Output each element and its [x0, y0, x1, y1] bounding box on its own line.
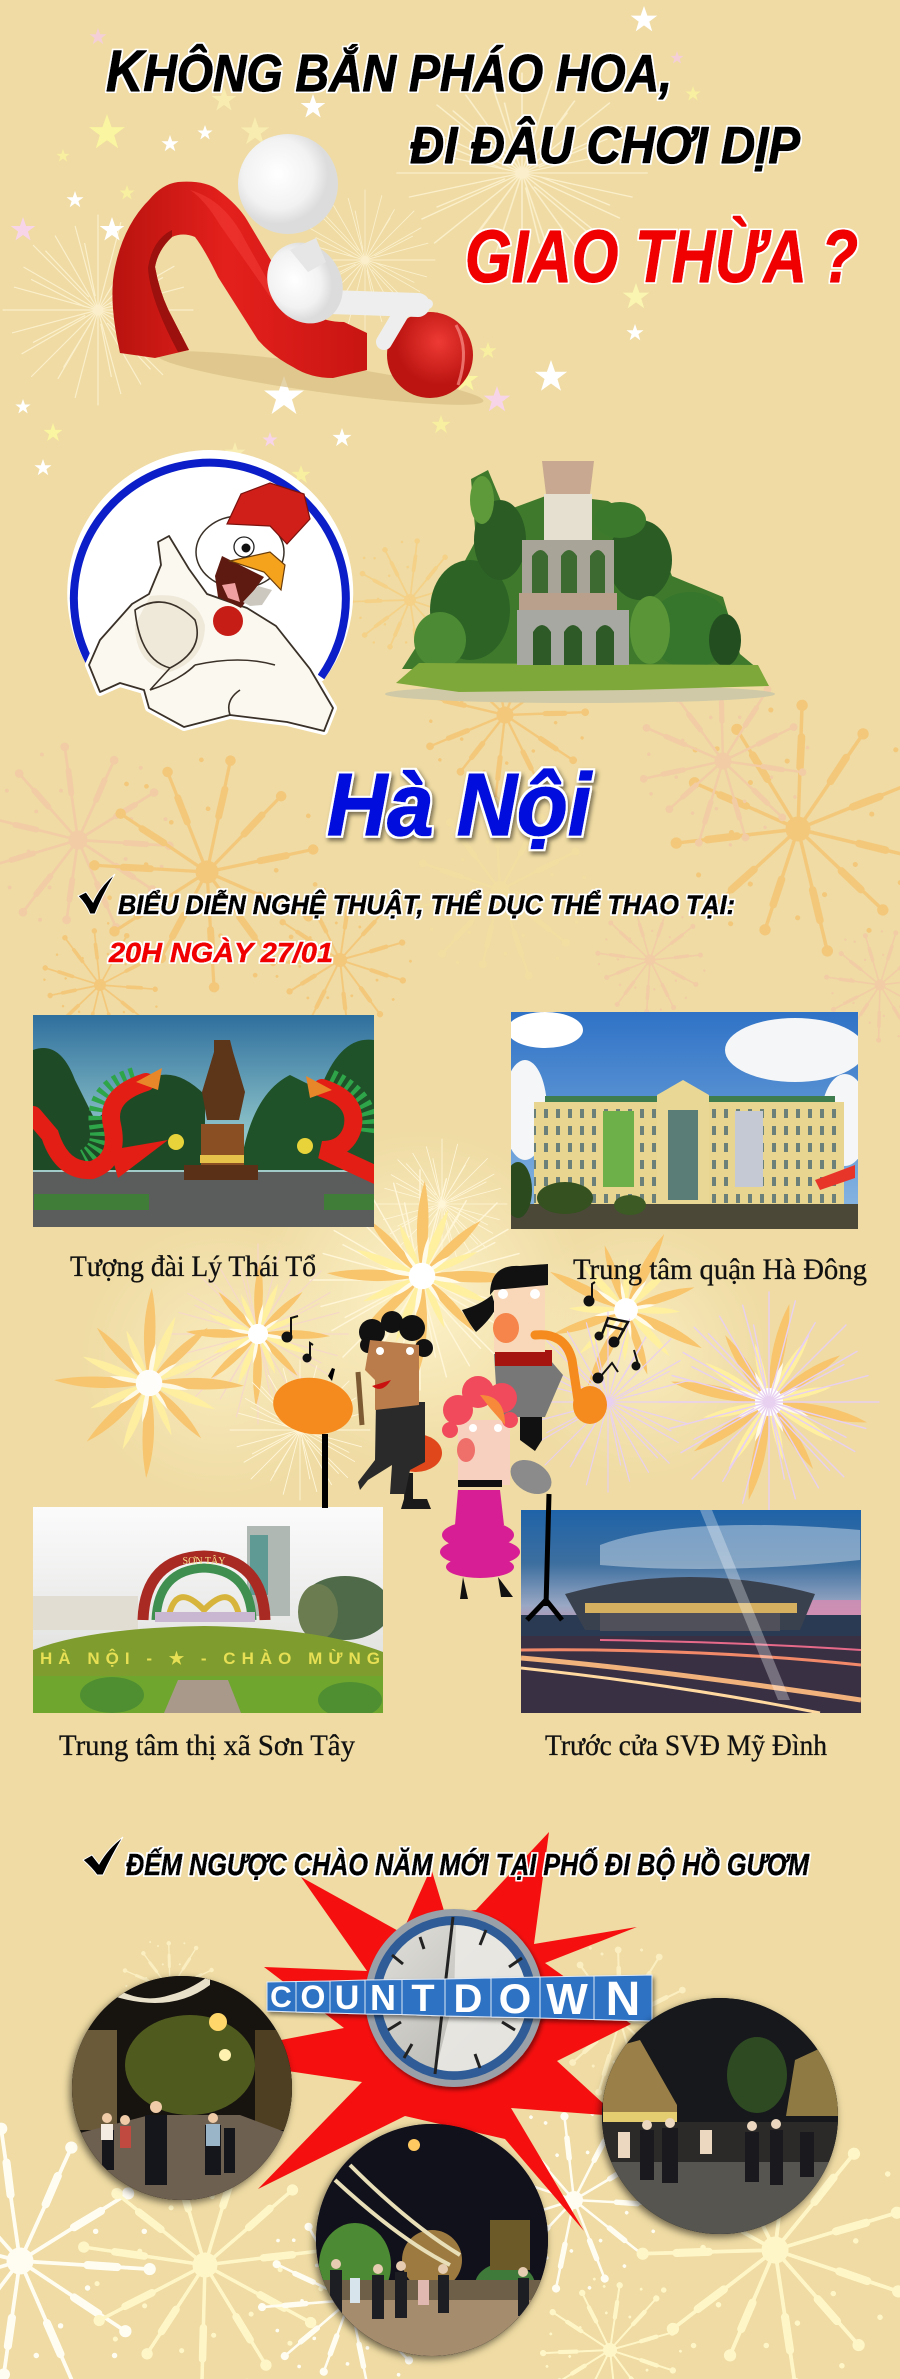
- background: pale fireworks behind hero: [3, 73, 647, 405]
- hero illustration: figure on red question mark: [112, 134, 485, 415]
- captions: Trung tâm thị xã Sơn Tây: [59, 1729, 355, 1762]
- photo: Ha Dong center: [503, 1012, 869, 1229]
- photo: Son Tay center: [33, 1507, 391, 1718]
- illustration: Turtle Tower with trees: [385, 461, 775, 703]
- red starburst: [258, 1832, 637, 2231]
- icon: check mark: [83, 1837, 123, 1875]
- circular photo: walking street bottom: [316, 2124, 548, 2358]
- circular photo: walking street right: [602, 1998, 839, 2234]
- captions: Tượng đài Lý Thái Tổ: [70, 1250, 316, 1283]
- circular photo: walking street left: [72, 1975, 295, 2200]
- heading: Hà Nội: Hà Nội: [327, 755, 592, 854]
- illustration: singer: [440, 1376, 520, 1599]
- COUNTDOWN banner: N: [606, 1973, 640, 2026]
- captions: [59, 1250, 867, 1762]
- subheading: performances: BIỂU DIỄN NGHỆ THUẬT, THỂ DỤC THỂ THAO TẠI:: [118, 889, 735, 920]
- COUNTDOWN banner: W: [546, 1975, 588, 2024]
- title: second line: ĐI ĐÂU CHƠI DỊP: [410, 116, 800, 175]
- captions: Trung tâm quận Hà Đông: [573, 1253, 867, 1286]
- COUNTDOWN banner: U: [335, 1979, 359, 2017]
- photo: My Dinh stadium: [521, 1510, 861, 1713]
- captions: Trước cửa SVĐ Mỹ Đình: [545, 1729, 827, 1762]
- clock: [365, 1909, 543, 2087]
- background: scattered stars: [11, 6, 701, 483]
- illustration: microphone on stand: [504, 1453, 562, 1620]
- COUNTDOWN banner: O: [499, 1975, 531, 2022]
- COUNTDOWN banner: O: [301, 1979, 325, 2015]
- icons: music notes: [282, 1282, 640, 1383]
- COUNTDOWN banner: T: [411, 1978, 435, 2020]
- illustration: saxophonist: [462, 1264, 607, 1451]
- COUNTDOWN banner: [267, 1973, 652, 2026]
- title: first line: KHÔNG BẮN PHÁO HOA,: [106, 39, 672, 104]
- icon: check mark: [78, 874, 115, 914]
- illustration: drummer: [269, 1311, 442, 1509]
- background: pastel fireworks behind Hà Nội section: [0, 529, 900, 1058]
- COUNTDOWN banner: N: [370, 1977, 396, 2018]
- background: white fireworks at bottom: [0, 1918, 900, 2379]
- photo: Son Tay center: HÀ NỘI - ★ - CHÀO MỪNG: [40, 1649, 380, 1668]
- photo: Ly Thai To monument: [33, 1015, 376, 1230]
- icon: rooster in blue circle: [71, 454, 349, 731]
- COUNTDOWN banner: C: [270, 1981, 292, 2014]
- photo: Son Tay center: SƠN TÂY: [183, 1555, 225, 1567]
- COUNTDOWN banner: D: [454, 1977, 482, 2021]
- time: 20h 27/01: 20H NGÀY 27/01: [108, 937, 333, 968]
- background: bright fireworks behind musicians: [54, 1130, 885, 1518]
